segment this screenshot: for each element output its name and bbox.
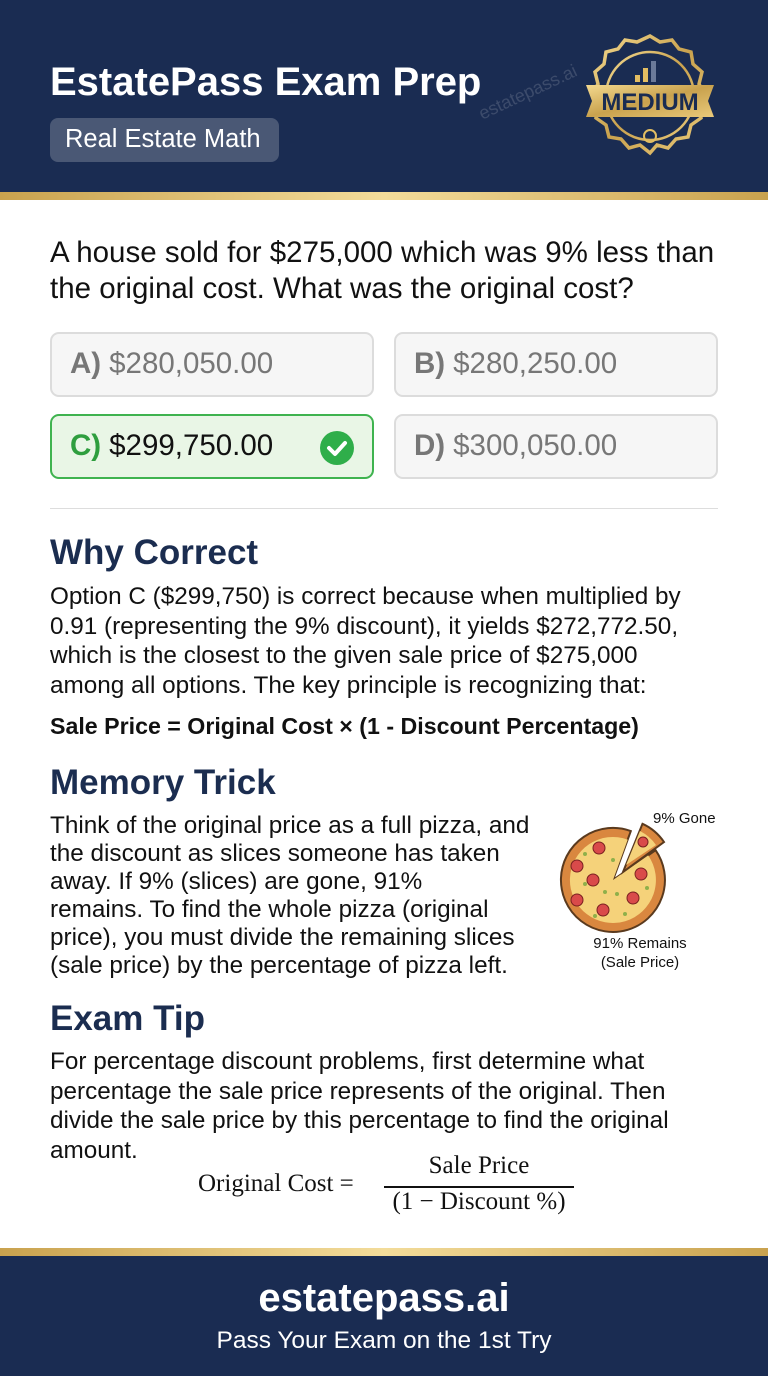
option B [394, 332, 718, 397]
text: exam tip: For percentage discount problems, first determine what percentage the sale price represents of the original. Then divide the sale price by this percentage to find the original amount. [50, 1048, 669, 1164]
text: memory trick: remains. To find the whole pizza (original [50, 896, 488, 923]
text: memory trick: (sale price) by the percentage of pizza left. [50, 952, 508, 979]
heading: memory trick: Memory Trick [50, 763, 276, 802]
text: memory trick: Think of the original price as a full pizza, and [50, 812, 529, 839]
gold stripe [0, 192, 768, 200]
footer tagline: Pass Your Exam on the 1st Try [216, 1327, 552, 1354]
heading: exam tip: Exam Tip [50, 999, 205, 1038]
text: memory trick: the discount as slices someone has taken [50, 840, 500, 867]
title: EstatePass Exam Prep [50, 60, 481, 104]
icon: pizza: 9% Gone [653, 810, 716, 827]
formula: Sale Price = Original Cost × (1 - Discount Percentage) [50, 713, 639, 739]
question: A house sold for $275,000 which was 9% less than the original cost. What was the original cost? [50, 236, 714, 305]
footer brand: estatepass.ai [258, 1276, 510, 1320]
watermark: estatepass.ai [476, 61, 580, 124]
badge: medium [586, 34, 714, 156]
text: memory trick: price), you must divide the remaining slices [50, 924, 515, 951]
option A [50, 332, 374, 397]
badge: medium: MEDIUM [601, 89, 699, 116]
equation: (1 − Discount %) [392, 1188, 566, 1215]
option D [394, 414, 718, 479]
subtitle tag: Real Estate Math [65, 125, 261, 153]
icon: check [320, 431, 354, 465]
heading: why correct: Why Correct [50, 533, 258, 572]
subtitle tag [50, 118, 279, 162]
icon: pizza: 91% Remains [593, 935, 687, 952]
text: why correct: Option C ($299,750) is correct because when multiplied by 0.91 (representing the 9% discount), it yields $272,772.50, which is the closest to the given sale price of $275,000 among all options. The key principle is recognizing that: [50, 583, 681, 698]
icon: pizza: (Sale Price) [601, 954, 679, 971]
text: memory trick [50, 812, 529, 979]
option C correct [50, 414, 374, 479]
option D: D) $300,050.00 [414, 429, 617, 462]
options [50, 332, 718, 479]
option A: A) $280,050.00 [70, 347, 273, 380]
option B: B) $280,250.00 [414, 347, 617, 380]
option C correct: C) $299,750.00 [70, 429, 273, 462]
text: memory trick: away. If 9% (slices) are gone, 91% [50, 868, 422, 895]
equation: Sale Price [429, 1152, 529, 1179]
header [0, 0, 768, 200]
icon: pizza [560, 810, 716, 971]
footer [0, 1248, 768, 1376]
equation: Original Cost = [198, 1170, 354, 1197]
equation [198, 1152, 574, 1215]
